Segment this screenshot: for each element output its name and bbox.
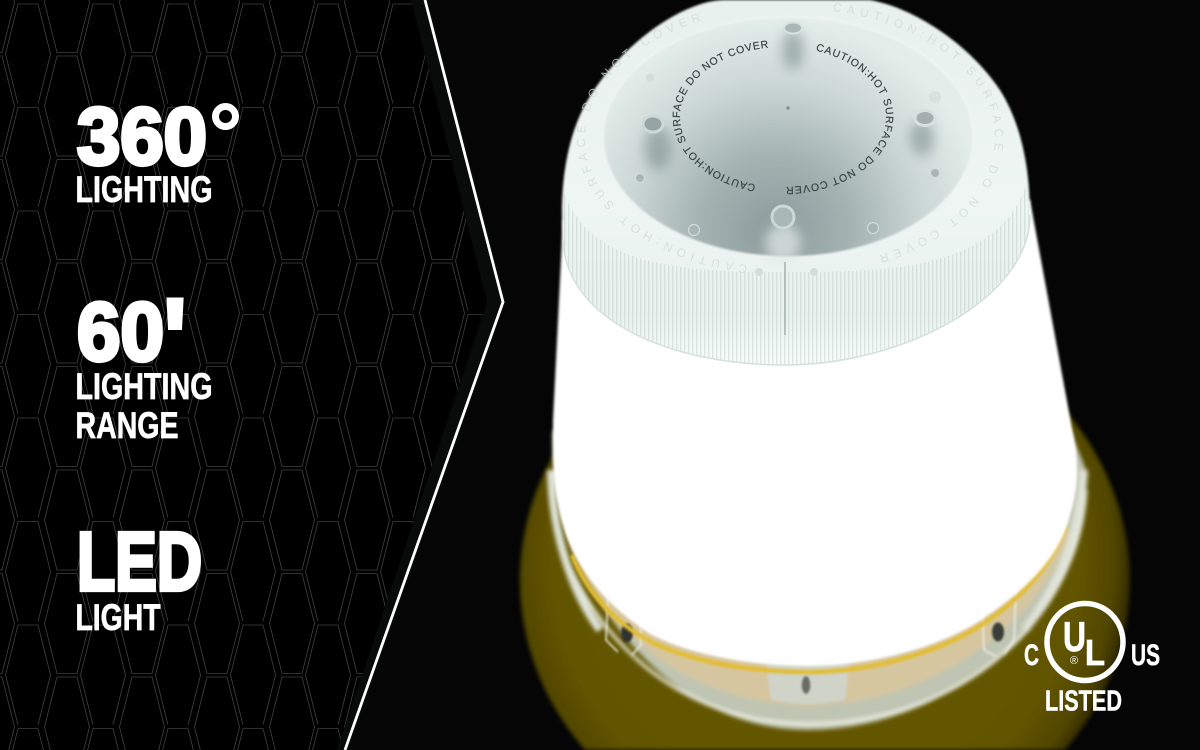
post left bbox=[643, 116, 663, 132]
logo ring bbox=[1047, 604, 1123, 680]
rib band bbox=[563, 180, 1032, 365]
stat: 360 lighting bbox=[76, 92, 236, 210]
post right bbox=[915, 110, 935, 126]
label range: RANGE bbox=[76, 405, 178, 446]
caution text ring: CAUTION:HOT SURFACE DO NOT COVER bbox=[786, 44, 894, 194]
small rim dots bbox=[636, 168, 940, 236]
logo U: U bbox=[1063, 613, 1086, 660]
logo L: L bbox=[1085, 632, 1105, 673]
UL listed logo bbox=[1024, 604, 1160, 718]
post smudges bbox=[644, 30, 934, 170]
logo registered mark: ® bbox=[1070, 655, 1078, 667]
logo listed: LISTED bbox=[1045, 686, 1122, 718]
logo us: US bbox=[1131, 639, 1160, 672]
prime mark: ' bbox=[160, 269, 190, 415]
lamp side screw left bbox=[606, 595, 641, 655]
lamp glowing body bbox=[553, 200, 1077, 666]
cap rim text bbox=[576, 3, 1004, 273]
left panel with hexagon pattern bbox=[0, 0, 487, 750]
caution text ring: CAUTION:HOT SURFACE DO NOT COVER bbox=[672, 40, 768, 192]
lamp frosted cap bbox=[560, 0, 1032, 366]
lamp yellow base bbox=[520, 305, 1130, 750]
cap seam line bbox=[784, 262, 786, 335]
number 360: 360 bbox=[77, 92, 207, 182]
caution text ring bbox=[672, 40, 894, 194]
label lighting: LIGHTING bbox=[76, 169, 212, 210]
stat: 60 foot range bbox=[76, 269, 212, 446]
upper rim dots bbox=[646, 74, 941, 276]
stat: LED light bbox=[76, 515, 202, 638]
lamp side screw right bbox=[982, 590, 1016, 656]
cap lower edge bbox=[563, 215, 1030, 365]
lamp yellow sliver bbox=[572, 525, 1066, 672]
post bottom bbox=[772, 206, 794, 228]
degree symbol bbox=[216, 106, 236, 126]
post top bbox=[784, 22, 802, 34]
arrow outline bbox=[345, 0, 503, 750]
lamp clear lower ring bbox=[551, 430, 1087, 730]
cap disc bbox=[603, 17, 973, 257]
cap rim text: CAUTION:HOT SURFACE DO NOT COVER bbox=[834, 3, 1004, 262]
panel shadow edge bbox=[337, 0, 506, 750]
label lighting: LIGHTING bbox=[76, 366, 212, 407]
word LED: LED bbox=[77, 515, 202, 608]
number 60 with prime: 60 bbox=[77, 285, 164, 378]
lamp photo bbox=[518, 0, 1132, 750]
lamp lower tab bbox=[765, 655, 850, 704]
cap rim text: CAUTION:HOT SURFACE DO NOT COVER bbox=[576, 14, 746, 273]
label light: LIGHT bbox=[76, 597, 161, 638]
logo c: C bbox=[1024, 639, 1039, 672]
centre dot bbox=[786, 106, 790, 110]
post lower glow bbox=[765, 223, 801, 263]
